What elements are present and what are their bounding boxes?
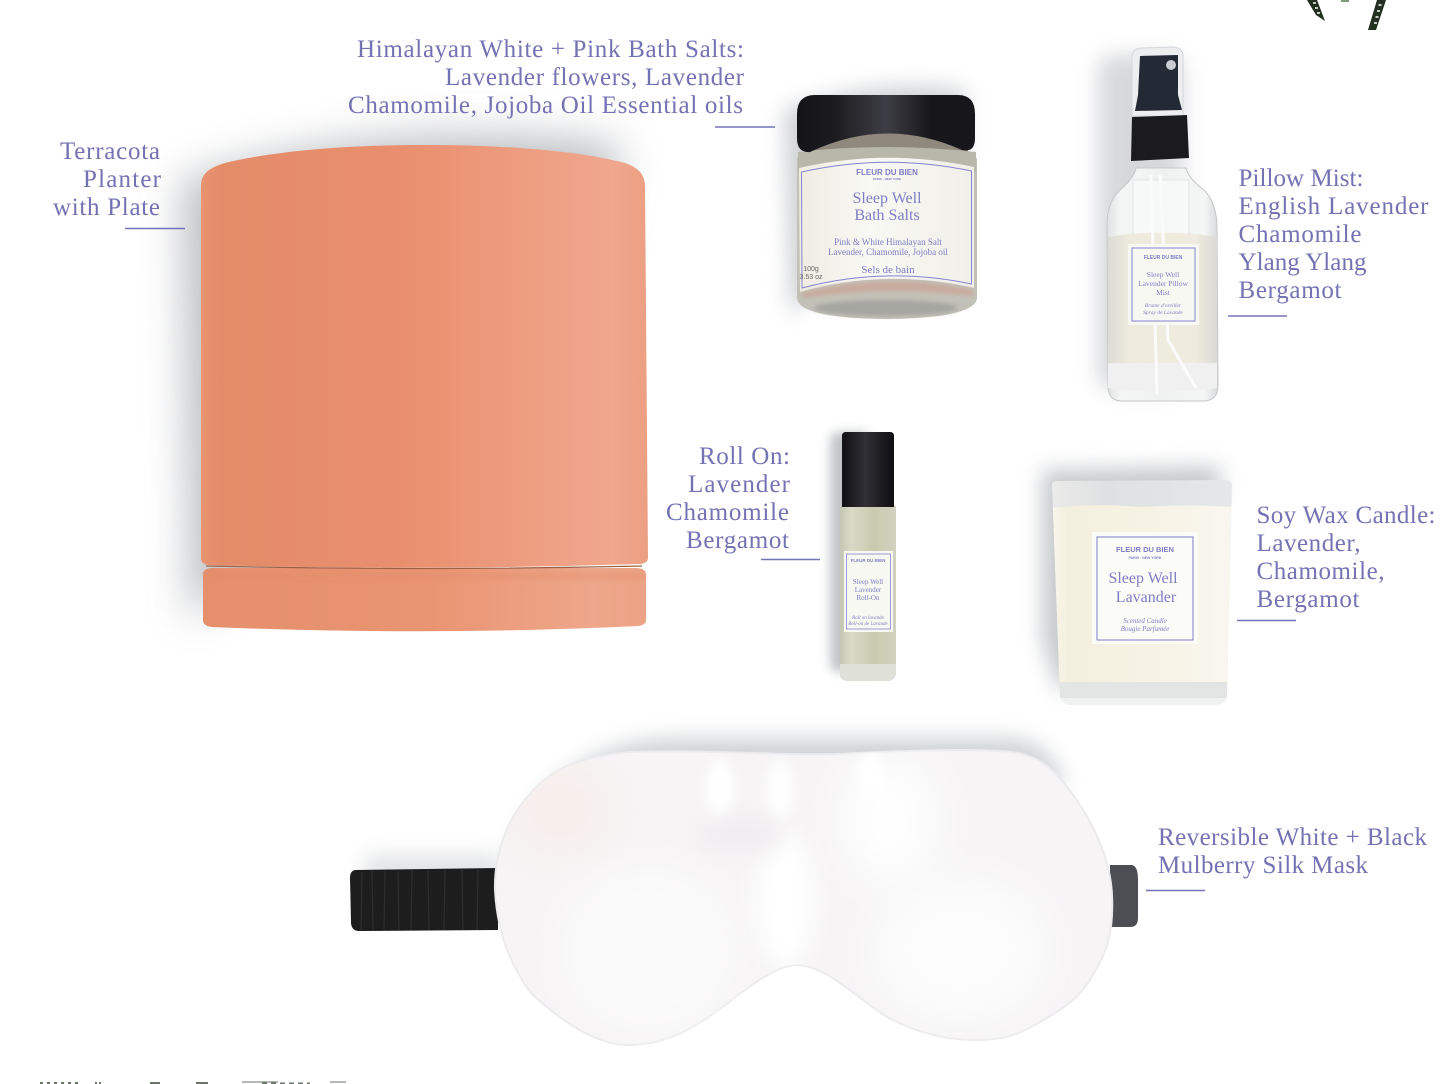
inner glass tube (1133, 180, 1189, 240)
product: silk sleep mask (350, 750, 1138, 1045)
label (1128, 244, 1199, 325)
caption: bath salts: Himalayan White + Pink Bath Salts: (357, 36, 744, 63)
label text: FLEUR DU BIEN (856, 168, 918, 177)
product: pillow mist bottle: Lavender Pillow (1138, 279, 1188, 288)
product: roll on bottle: FLEUR DU BIEN (851, 558, 885, 563)
label text: Lavender, Chamomile, Jojoba oil (828, 247, 948, 257)
decoration: bottom-left plant fragments (40, 1082, 346, 1084)
label (799, 158, 974, 292)
product: roll on bottle: Sleep Well (853, 578, 883, 586)
product: roll on bottle (840, 432, 896, 681)
caption: pillow mist: Pillow Mist: (1238, 165, 1364, 192)
caption: bath salts (348, 36, 775, 127)
shadow: pillow mist (1098, 55, 1183, 390)
caption: terracotta planter: Terracota (60, 138, 160, 165)
mask body (495, 750, 1112, 1045)
caption: soy wax candle: Chamomile, (1256, 558, 1384, 585)
caption: pillow mist: English Lavender (1238, 193, 1429, 220)
satin highlights (536, 752, 920, 968)
label text (800, 168, 948, 281)
glass bottom highlight (1060, 698, 1226, 705)
label text: PARIS · NEW YORK (873, 177, 902, 181)
shadow: bath salts jar (784, 86, 965, 315)
caption: bath salts: Chamomile, Jojoba Oil Essential oils (348, 92, 743, 119)
caption: roll on: Roll On: (699, 443, 790, 470)
strap pleats (361, 870, 478, 930)
product: pillow mist bottle (1107, 47, 1218, 401)
gap line (206, 566, 642, 568)
left strap (350, 868, 498, 931)
caption: pillow mist (1228, 165, 1429, 316)
shadow: mask (510, 738, 1065, 860)
clear cap (1132, 47, 1183, 116)
caption: soy wax candle: Bergamot (1256, 586, 1360, 613)
label text: 100g (803, 266, 819, 273)
label text: Bath Salts (854, 207, 920, 224)
salts under label (802, 282, 973, 298)
caption: pillow mist: Ylang Ylang (1238, 249, 1367, 276)
plate shaded band (204, 572, 645, 580)
lid (797, 95, 975, 152)
product: roll on bottle: Roll on lavande (851, 616, 885, 621)
planter body (201, 145, 648, 568)
base (1060, 682, 1228, 683)
caption: bath salts: Lavender flowers, Lavender (445, 64, 745, 91)
caption: terracotta planter (53, 138, 185, 228)
caption: terracotta planter: with Plate (53, 194, 160, 221)
product: pillow mist bottle: Brume d'oreiller (1145, 303, 1182, 309)
cap (842, 432, 894, 507)
caption: roll on: Lavender (688, 471, 791, 498)
bottle glass (1107, 168, 1218, 401)
product: pillow mist bottle: Spray de Lavande (1143, 310, 1183, 316)
label frame (802, 162, 972, 288)
label (1092, 532, 1198, 644)
caption: pillow mist: Chamomile (1238, 221, 1362, 248)
product: soy wax candle: Scented Candle (1123, 617, 1167, 625)
decoration: top-right plant fragment (1307, 0, 1386, 30)
plate (203, 568, 646, 631)
dip tube (1151, 175, 1196, 395)
caption: silk mask: Reversible White + Black (1158, 824, 1428, 851)
right strap (1110, 865, 1138, 927)
product: roll on bottle: Lavender (855, 586, 882, 594)
glass (1052, 480, 1232, 705)
product: soy wax candle: PARIS · NEW YORK (1129, 556, 1162, 560)
jar glass (797, 158, 977, 319)
product: pillow mist bottle: Sleep Well (1147, 270, 1179, 279)
wax (1050, 505, 1235, 683)
product: bath salts jar (797, 95, 977, 319)
caption: roll on: Chamomile (666, 499, 789, 526)
product: terracotta planter with plate (201, 145, 648, 631)
shadow: roll on (830, 432, 870, 672)
product: roll on bottle: Roll-On (857, 594, 880, 602)
caption: roll on (666, 443, 820, 560)
glass (840, 506, 896, 681)
shadow: candle (1042, 466, 1220, 695)
product: soy wax candle: Lavander (1116, 589, 1177, 606)
liquid (1108, 232, 1217, 363)
product: soy wax candle: Sleep Well (1108, 570, 1178, 587)
product: roll on bottle: Roll-on de Lavande (847, 622, 888, 627)
label text: Pink & White Himalayan Salt (834, 237, 942, 247)
jar base (814, 300, 958, 316)
label text: Sleep Well (852, 190, 922, 207)
collar (1131, 115, 1189, 161)
label text: Sels de bain (861, 264, 915, 276)
product: soy wax candle (1050, 480, 1235, 710)
caption: soy wax candle: Soy Wax Candle: (1256, 502, 1436, 529)
product: soy wax candle: Bougie Parfumée (1121, 625, 1169, 633)
caption: soy wax candle (1237, 502, 1436, 620)
shadow: planter (182, 134, 620, 620)
product: pillow mist bottle: Mist (1156, 288, 1171, 297)
label text: 3.53 oz (800, 274, 823, 281)
shadow: mask strap (365, 855, 500, 885)
caption: silk mask (1146, 824, 1428, 890)
caption: roll on: Bergamot (686, 527, 789, 554)
label (844, 551, 893, 632)
caption: terracotta planter: Planter (83, 166, 162, 193)
product: pillow mist bottle: FLEUR DU BIEN (1144, 255, 1183, 261)
caption: silk mask: Mulberry Silk Mask (1158, 852, 1368, 879)
caption: soy wax candle: Lavender, (1256, 530, 1360, 557)
caption: pillow mist: Bergamot (1238, 277, 1342, 304)
pump (1135, 55, 1182, 111)
product: soy wax candle: FLEUR DU BIEN (1116, 545, 1174, 554)
